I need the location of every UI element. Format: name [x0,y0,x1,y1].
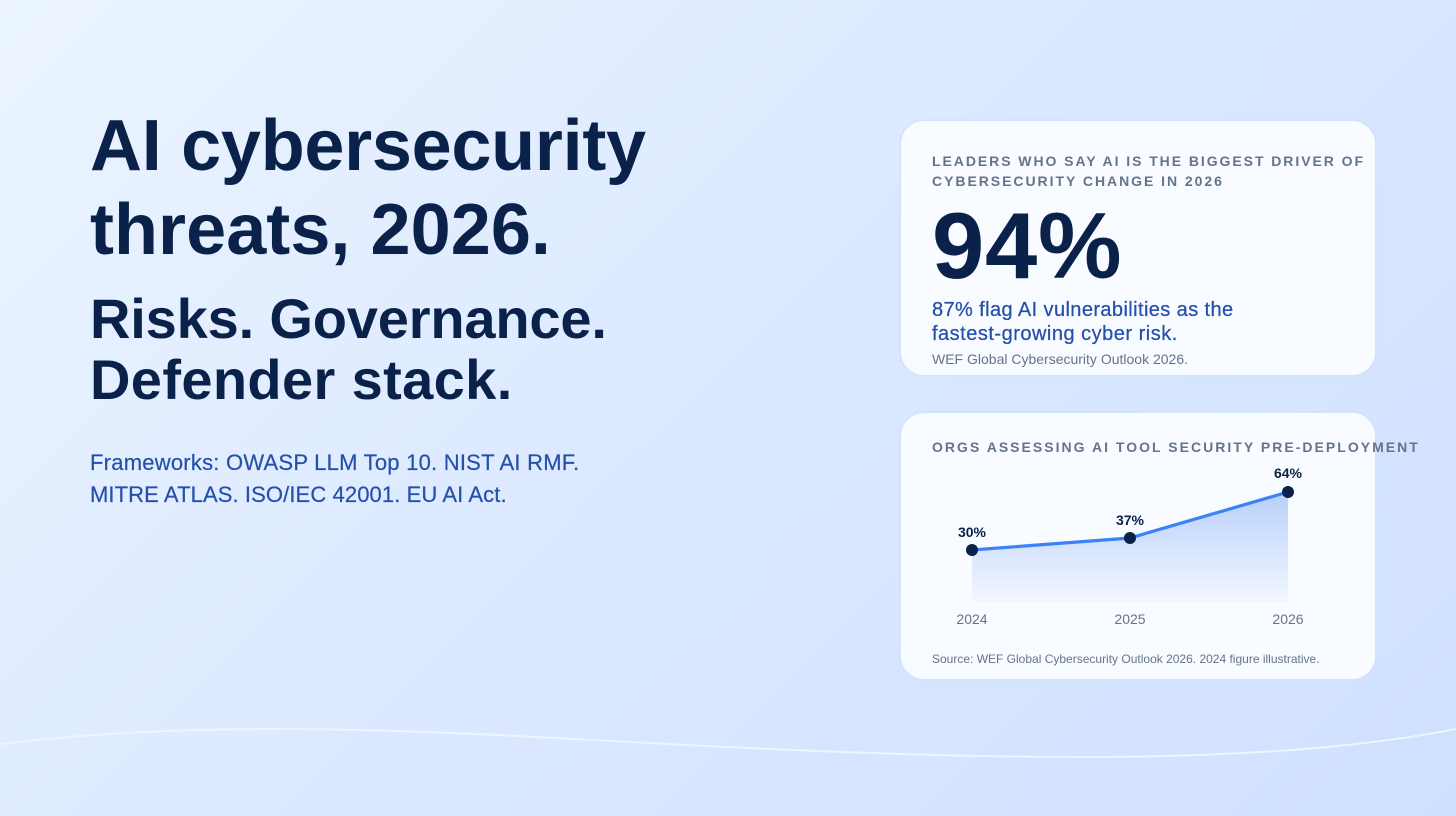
data points [966,486,1294,556]
value labels: 37% [1116,512,1145,528]
stat description: 87% flag AI vulnerabilities as the [932,299,1234,321]
panel: 94 percent stat [900,120,1376,376]
stat label: CYBERSECURITY CHANGE IN 2026 [932,173,1224,189]
stat label: LEADERS WHO SAY AI IS THE BIGGEST DRIVER OF [932,153,1365,169]
stat source: WEF Global Cybersecurity Outlook 2026. [932,351,1188,367]
year labels: 2024 [956,611,988,627]
frameworks text [90,450,579,507]
title: threats, 2026. [90,190,551,270]
area [972,492,1288,602]
value labels [958,465,1303,540]
panel: line chart [900,412,1376,680]
chart label: ORGS ASSESSING AI TOOL SECURITY PRE-DEPLOYMENT [932,439,1420,455]
line [972,492,1288,550]
title: AI cybersecurity [90,106,646,186]
frameworks text: MITRE ATLAS. ISO/IEC 42001. EU AI Act. [90,482,507,507]
stat label [932,153,1365,189]
subtitle [90,287,607,411]
line chart [956,465,1304,627]
year labels [956,611,1304,627]
subtitle: Risks. Governance. [90,287,607,350]
year labels: 2025 [1114,611,1146,627]
value labels: 64% [1274,465,1303,481]
frameworks text: Frameworks: OWASP LLM Top 10. NIST AI RMF. [90,450,579,475]
subtitle: Defender stack. [90,348,513,411]
stat description: fastest-growing cyber risk. [932,323,1178,345]
year labels: 2026 [1272,611,1304,627]
big number: 94% [932,193,1122,298]
title [90,106,646,270]
value labels: 30% [958,524,987,540]
stat description [932,299,1234,345]
chart source: Source: WEF Global Cybersecurity Outlook 2026. 2024 figure illustrative. [932,652,1320,666]
